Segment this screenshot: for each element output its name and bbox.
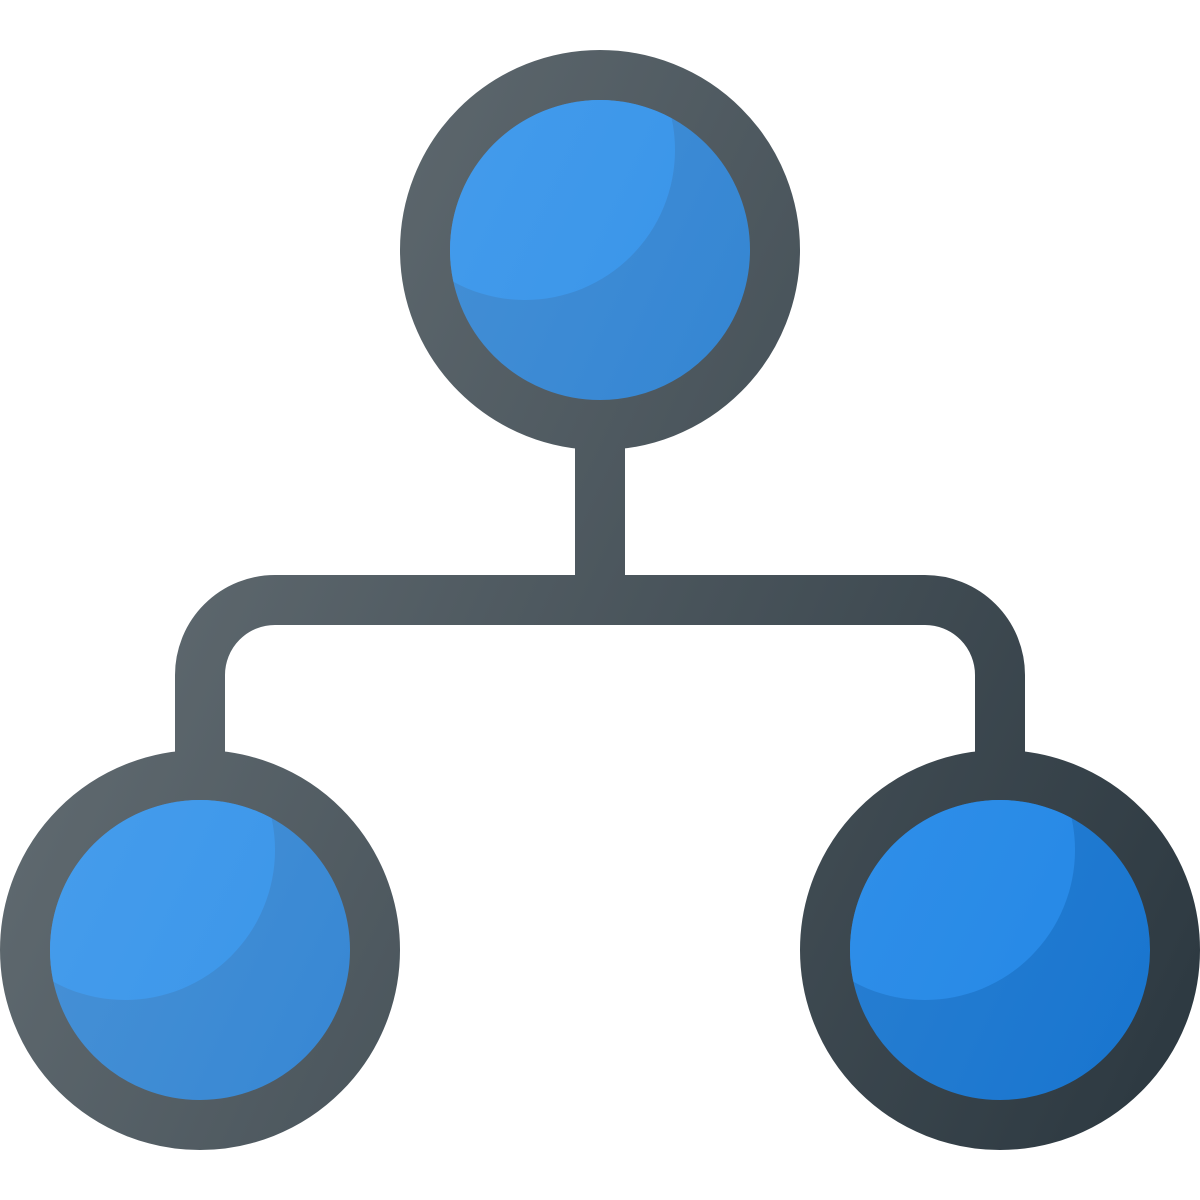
bottom left node (0, 700, 375, 1125)
top node (375, 0, 775, 425)
bottom right node (775, 700, 1175, 1125)
connector lines (200, 430, 1000, 770)
